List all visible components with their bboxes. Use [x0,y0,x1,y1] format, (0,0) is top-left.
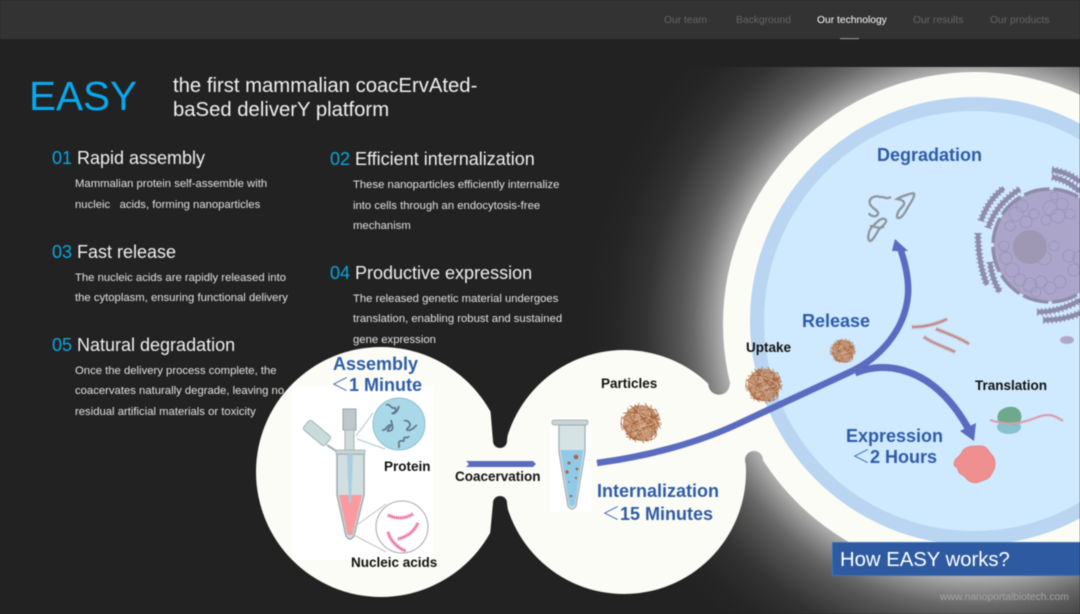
feature 05: natural degradation: residual artificial materials or toxicity [75,406,256,418]
heading: Assembly under 1 minute: Assembly [333,354,418,374]
feature 03: fast release: Fast release [77,242,176,262]
tube body [559,425,585,509]
tube liquid [560,450,584,506]
subtitle: baSed deliverY platform [173,99,389,121]
title: EASY: EASY [29,73,137,119]
feature 05: natural degradation: Natural degradation [77,335,235,355]
feature 05: natural degradation: 05 [52,335,72,355]
particle: release [828,334,857,366]
arrow: uptake pathway to degradation [597,239,908,463]
heading: Internalization under 15 minutes: Internalization [597,481,719,501]
panel: assembly illustration [292,386,437,570]
feature 04: productive expression: translation, enabling robust and sustained [353,313,562,325]
feature 01: rapid assembly: nucleic acids, forming nanoparticles [75,199,261,211]
icon: protein circle [373,398,425,450]
pipette tip [343,409,356,452]
active nav underline [840,38,859,39]
label: Release: Release [802,311,870,331]
feature 01: rapid assembly: Mammalian protein self-assemble with [75,178,267,190]
feature 01: rapid assembly: Rapid assembly [77,148,205,168]
feature 05: natural degradation: coacervates naturally degrade, leaving no [75,385,284,397]
arrow: expression branch [855,367,976,441]
feature 03: fast release: The nucleic acids are rapidly released into [75,272,286,284]
open tube lid [302,419,336,451]
feature 03: fast release: 03 [52,242,72,262]
callout lines: protein [356,413,385,449]
cytoplasm [764,111,1080,531]
feature 03: fast release [52,242,288,304]
diagram backdrop: connected cream circles [256,72,1080,597]
feature 04: productive expression: Productive expression [355,263,532,283]
white image backdrop [292,386,433,560]
tube cap [552,420,588,425]
nucleus [993,189,1080,302]
heading: Assembly under 1 minute: ＜1 Minute [331,371,422,397]
feature 04: productive expression: The released genetic material undergoes [353,293,559,305]
feature 02: efficient internalization [330,149,559,232]
label: Translation: Translation [975,378,1047,393]
feature 02: efficient internalization: Efficient internalization [355,149,535,169]
label: Degradation: Degradation [877,145,982,165]
glow behind cell [582,67,1080,614]
feature 01: rapid assembly: 01 [52,148,72,168]
icon: nucleic acid circle [376,501,428,553]
panel: cell [743,97,1080,545]
label: Coacervation: Coacervation [455,469,541,484]
label: Nucleic acids: Nucleic acids [351,555,437,570]
endoplasmic reticulum [978,170,1080,320]
feature 05: natural degradation: Once the delivery process complete, the [75,365,277,377]
heading: Internalization under 15 minutes: ＜15 Minutes [602,500,713,526]
mRNA strands [912,319,969,352]
feature 03: fast release: the cytoplasm, ensuring functional delivery [75,292,288,304]
label: Protein: Protein [384,459,431,474]
label: Uptake: Uptake [746,340,792,355]
footer: website: www.nanoportalbiotech.com [939,592,1069,603]
nav item: Our products: Our products [990,15,1050,26]
feature 04: productive expression [330,263,562,346]
feature 05: natural degradation [52,335,284,418]
label: Expression under 2 hours: ＜2 Hours [852,443,937,469]
microtube [336,450,365,539]
feature 04: productive expression: 04 [330,263,350,283]
feature 02: efficient internalization: into cells through an endocytosis-free [353,200,540,212]
cell membrane [750,97,1080,545]
label: Particles: Particles [601,376,657,391]
suspended particles [565,455,578,497]
arrow: coacervation [466,461,536,467]
organelle [1060,336,1074,344]
feature 02: efficient internalization: mechanism [353,220,411,232]
label: Expression under 2 hours: Expression [846,426,943,446]
banner: How EASY works: How EASY works? [840,549,1010,571]
feature 02: efficient internalization: 02 [330,149,350,169]
feature 04: productive expression: gene expression [353,334,436,346]
feature 02: efficient internalization: These nanoparticles efficiently internalize [353,179,559,191]
white image backdrop [550,418,591,512]
particle: uptake [743,360,784,406]
navigation bar [0,0,1080,39]
nav item: Background: Background [736,15,791,26]
nav item: Our technology (active): Our technology [817,15,888,26]
nav item: Our team: Our team [664,15,707,26]
expressed protein [954,446,995,483]
degraded fragments [868,193,914,241]
banner: How EASY works [832,542,1080,576]
nav item: Our results: Our results [913,15,963,26]
icon: particle cluster [618,396,664,446]
subtitle: the first mammalian coacErvAted- [173,75,477,97]
feature 01: rapid assembly [52,148,267,211]
callout lines: nucleic acids [350,504,386,552]
ribosome with mRNA [990,407,1063,434]
panel: particles tube [550,418,591,512]
